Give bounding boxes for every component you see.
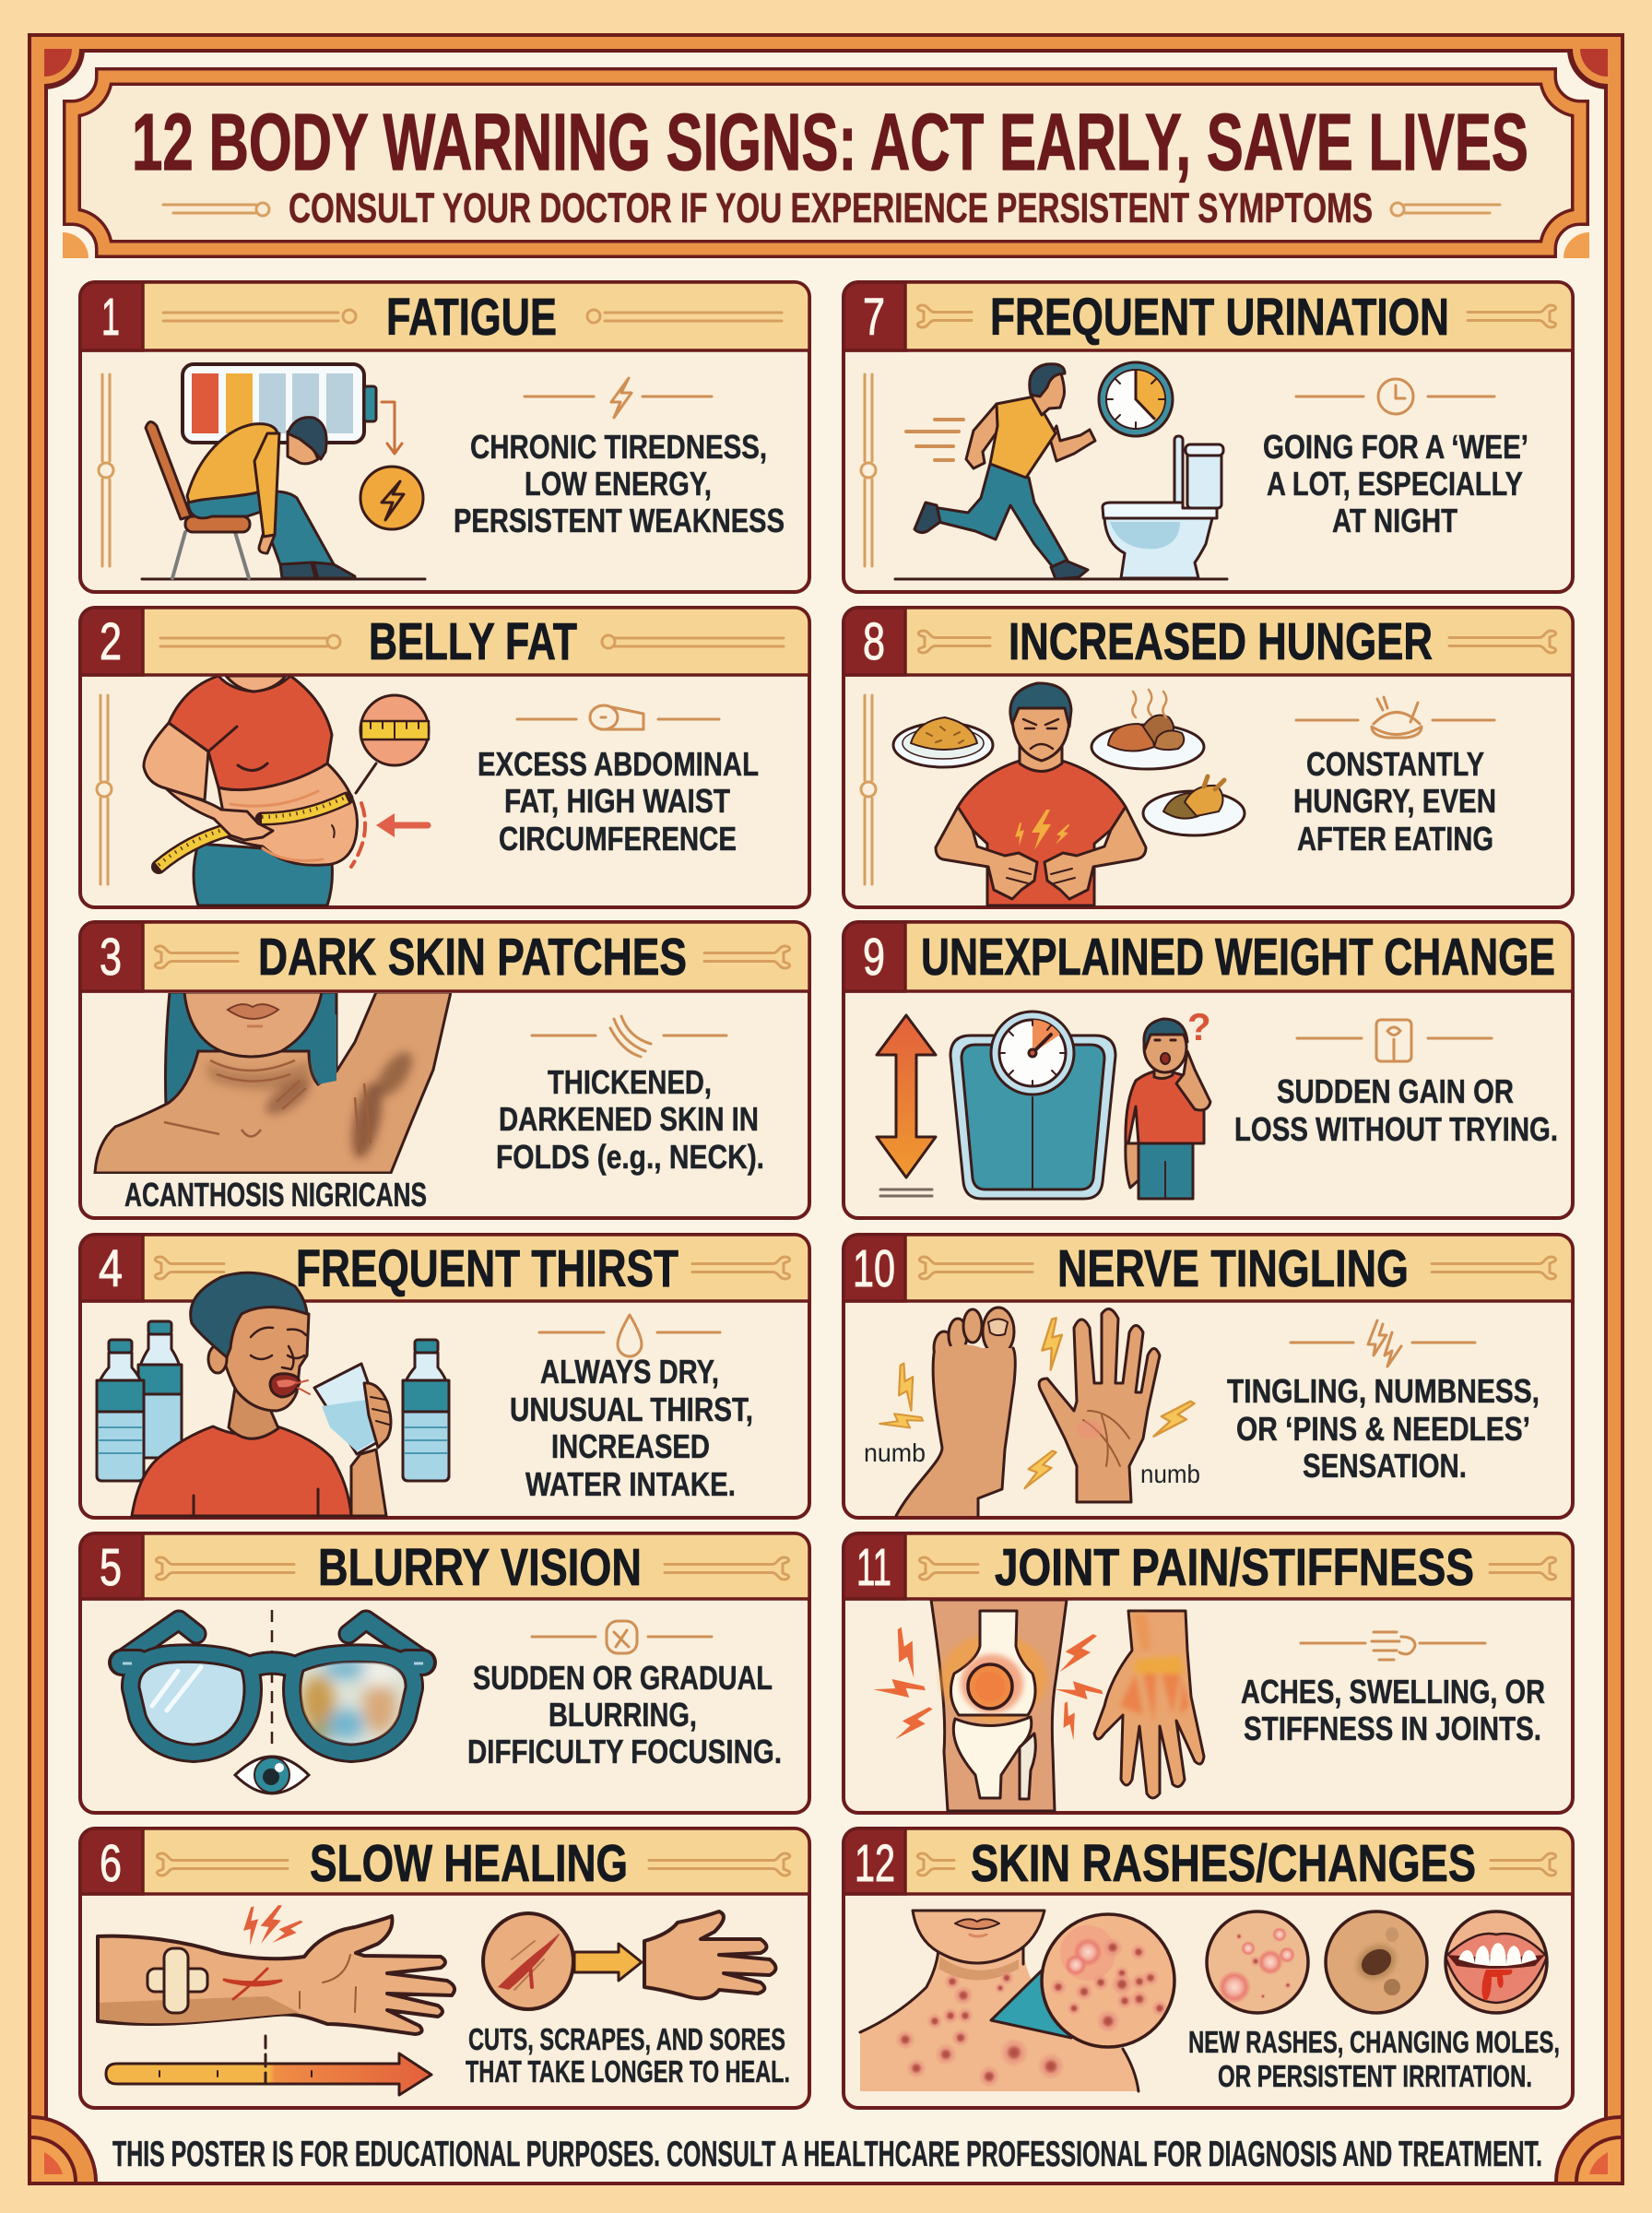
description: THAT TAKE LONGER TO HEAL.	[466, 2054, 790, 2089]
icon: tape measure	[517, 705, 719, 729]
number 4	[80, 1235, 143, 1301]
number 1	[80, 282, 143, 350]
description: GOING FOR A ‘WEE’	[1263, 428, 1528, 466]
icon: bolt	[525, 378, 712, 418]
description: HUNGRY, EVEN	[1293, 782, 1496, 820]
description	[510, 1353, 753, 1503]
heading: fatigue: FATIGUE	[386, 288, 557, 347]
description: TINGLING, NUMBNESS,	[1227, 1372, 1540, 1410]
header ornaments	[917, 305, 1556, 327]
illustration: belly with measuring tape	[144, 676, 429, 905]
side ornament	[861, 695, 876, 884]
header ornaments	[155, 1257, 790, 1279]
panel: 9 unexplained weight change	[844, 922, 1573, 1218]
icon: skin folds	[532, 1016, 726, 1057]
label: numb foot: numb	[864, 1438, 926, 1467]
heading: dark skin patches: DARK SKIN PATCHES	[258, 928, 687, 987]
description: CONSTANTLY	[1306, 745, 1484, 783]
heading: belly fat: BELLY FAT	[369, 612, 577, 671]
number 1: 1	[101, 288, 120, 347]
icon: joint	[1301, 1632, 1485, 1660]
panel: 12 skin rashes	[844, 1828, 1573, 2108]
panel: 7 frequent urination	[844, 282, 1573, 592]
description: UNUSUAL THIRST,	[510, 1391, 753, 1428]
number 9	[844, 922, 905, 991]
description: DARKENED SKIN IN	[499, 1100, 759, 1138]
panel: 11 joint pain	[844, 1533, 1573, 1813]
number 12: 12	[855, 1834, 895, 1893]
description: FOLDS (e.g., NECK).	[496, 1138, 764, 1176]
number 3: 3	[100, 928, 122, 987]
panel: 2 belly fat	[80, 608, 809, 907]
icon: clock	[1296, 379, 1494, 414]
description	[466, 2022, 790, 2089]
description: AT NIGHT	[1332, 502, 1457, 539]
illustration: thirsty man and water bottles	[97, 1272, 449, 1516]
description: CUTS, SCRAPES, AND SORES	[468, 2022, 785, 2056]
description: EXCESS ABDOMINAL	[478, 745, 759, 783]
description: A LOT, ESPECIALLY	[1267, 465, 1523, 503]
illustration: inflamed knee and hand	[872, 1600, 1204, 1811]
label: numb hand: numb	[1140, 1460, 1200, 1488]
subtitle ornaments	[163, 203, 1500, 216]
heading: frequent urination: FREQUENT URINATION	[990, 288, 1449, 347]
header ornaments	[163, 310, 782, 323]
icon: blur square	[532, 1621, 712, 1653]
illustration: man running to toilet	[895, 362, 1227, 579]
number 10	[844, 1235, 905, 1301]
illustration: glasses, blurred lens and eye	[122, 1610, 423, 1793]
heading: blurry vision: BLURRY VISION	[318, 1538, 642, 1597]
description: ALWAYS DRY,	[540, 1353, 719, 1391]
header ornaments	[917, 1853, 1556, 1876]
description: PERSISTENT WEAKNESS	[454, 502, 785, 539]
illustration: arm with wound, scrape and healing timeline	[98, 1903, 776, 2095]
heading: frequent thirst: FREQUENT THIRST	[296, 1239, 678, 1298]
description: LOSS WITHOUT TRYING.	[1234, 1110, 1558, 1148]
heading: nerve tingling: NERVE TINGLING	[1057, 1239, 1409, 1298]
caption: acanthosis nigricans: ACANTHOSIS NIGRICANS	[124, 1176, 427, 1213]
title banner	[63, 77, 1589, 258]
header ornaments	[918, 631, 1556, 653]
number 10: 10	[853, 1239, 895, 1298]
icon: bowl	[1296, 697, 1494, 738]
side ornament	[99, 374, 113, 566]
illustration: neck rash and zoom circles	[860, 1911, 1547, 2091]
header ornaments	[919, 1557, 1556, 1580]
header ornaments	[155, 946, 790, 968]
number 6	[80, 1828, 143, 1894]
header ornaments	[157, 1853, 790, 1876]
description: CIRCUMFERENCE	[499, 820, 737, 858]
illustration: acanthosis on neck and underarm	[95, 992, 451, 1173]
header ornaments	[919, 1257, 1556, 1279]
heading: joint pain/stiffness: JOINT PAIN/STIFFNESS	[995, 1538, 1474, 1597]
description	[478, 745, 759, 858]
number 2	[80, 608, 143, 675]
description: CHRONIC TIREDNESS,	[470, 428, 767, 466]
icon: bathroom scale	[1297, 1020, 1492, 1061]
number 5	[80, 1533, 143, 1599]
panel: 4 frequent thirst	[80, 1235, 809, 1518]
description: WATER INTAKE.	[525, 1465, 736, 1503]
description	[467, 1659, 782, 1770]
description	[1241, 1673, 1545, 1747]
number 11	[844, 1533, 905, 1599]
number 7	[844, 282, 905, 350]
number 8: 8	[863, 612, 885, 671]
panel: 3 dark skin patches	[80, 922, 809, 1218]
description: THICKENED,	[548, 1063, 712, 1101]
panel: 10 nerve tingling	[844, 1235, 1573, 1518]
heading: slow healing: SLOW HEALING	[310, 1834, 628, 1893]
description: SENSATION.	[1303, 1447, 1467, 1485]
panel: 1 fatigue	[80, 282, 809, 592]
description: DIFFICULTY FOCUSING.	[467, 1733, 782, 1770]
description: ACHES, SWELLING, OR	[1241, 1673, 1545, 1710]
number 7: 7	[863, 288, 885, 347]
description: BLURRING,	[549, 1696, 697, 1734]
description: FAT, HIGH WAIST	[504, 782, 730, 820]
number 2: 2	[100, 612, 122, 671]
number 12	[844, 1828, 905, 1894]
description	[496, 1063, 764, 1176]
description	[1234, 1072, 1558, 1148]
header ornaments	[160, 635, 784, 648]
number 9: 9	[863, 928, 885, 987]
description	[454, 428, 785, 539]
description: LOW ENERGY,	[525, 465, 712, 503]
number 4: 4	[99, 1239, 123, 1298]
side ornament	[97, 695, 112, 884]
illustration: scale, up-down arrow and worried person	[877, 1012, 1210, 1199]
header ornaments	[156, 1557, 789, 1580]
description: SUDDEN OR GRADUAL	[473, 1659, 773, 1697]
icon: lightning nerve	[1291, 1320, 1475, 1367]
panel: 6 slow healing	[80, 1828, 809, 2108]
heading: skin rashes/changes: SKIN RASHES/CHANGES	[971, 1834, 1476, 1893]
description: SUDDEN GAIN OR	[1277, 1072, 1514, 1110]
description: OR PERSISTENT IRRITATION.	[1218, 2059, 1532, 2093]
number 8	[844, 608, 905, 675]
description	[1263, 428, 1528, 539]
panel: 5 blurry vision	[80, 1533, 809, 1813]
description: OR ‘PINS & NEEDLES’	[1236, 1410, 1530, 1448]
description	[1188, 2025, 1560, 2093]
illustration: tired person and low battery	[142, 364, 425, 579]
question mark: ?	[1187, 1005, 1211, 1048]
illustration: foot and hand with tingling	[879, 1308, 1196, 1516]
number 5: 5	[100, 1538, 122, 1597]
illustration: hungry man and plates of food	[893, 683, 1245, 905]
description: STIFFNESS IN JOINTS.	[1244, 1710, 1541, 1747]
description: INCREASED	[551, 1427, 710, 1465]
side ornament	[861, 374, 876, 566]
number 11: 11	[856, 1538, 891, 1597]
number 3	[80, 922, 143, 991]
panel: 8 increased hunger	[844, 608, 1573, 907]
number 6: 6	[100, 1834, 122, 1893]
heading: increased hunger: INCREASED HUNGER	[1009, 612, 1433, 671]
icon: water drop	[539, 1315, 720, 1356]
description	[1227, 1372, 1540, 1485]
description: AFTER EATING	[1297, 820, 1493, 858]
description	[1293, 745, 1496, 858]
